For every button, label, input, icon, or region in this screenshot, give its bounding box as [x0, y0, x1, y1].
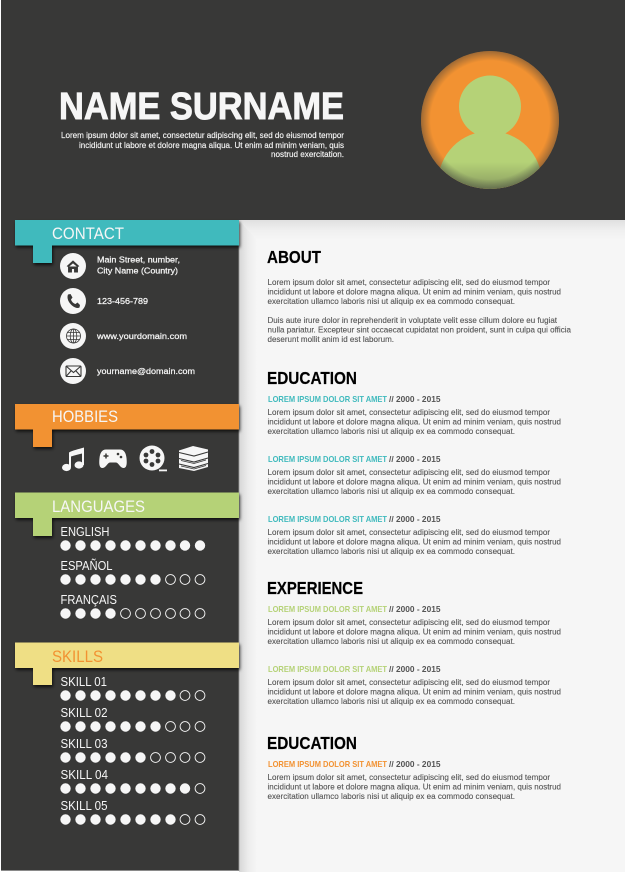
language: francais	[60, 593, 205, 619]
text block: about paragraph 2: deserunt mollit anim id est laborum.	[268, 334, 394, 344]
heading: about: ABOUT	[267, 247, 321, 267]
entry: experience 2: LOREM IPSUM DOLOR SIT AMET	[268, 665, 387, 674]
heading: skills ribbon	[15, 642, 239, 685]
skill 02: SKILL 02	[60, 706, 108, 720]
entry: experience 2: incididunt ut labore et dolore magna aliqua. Ut enim ad minim veniam, quis nostrud	[268, 686, 561, 696]
text block: about paragraph 1: incididunt ut labore et dolore magna aliqua. Ut enim ad minim veniam, quis nostrud	[268, 286, 561, 296]
entry: experience 1: // 2000 - 2015	[389, 604, 441, 614]
skill 05	[60, 799, 205, 825]
icon: envelope	[60, 358, 86, 384]
panel: skills	[15, 642, 239, 825]
panel: main content background	[239, 220, 625, 872]
heading: education second: EDUCATION	[267, 733, 357, 753]
text: phone: 123-456-789	[97, 296, 148, 306]
entry: experience 1: LOREM IPSUM DOLOR SIT AMET	[268, 605, 387, 614]
heading: hobbies ribbon	[15, 404, 239, 447]
heading: education: EDUCATION	[267, 368, 357, 388]
entry: education second 1: LOREM IPSUM DOLOR SIT AMET	[268, 760, 387, 769]
panel: header	[1, 0, 625, 235]
language: francais: FRANÇAIS	[60, 593, 117, 607]
entry: education second 1: // 2000 - 2015	[389, 759, 441, 769]
language: espanol: ESPAÑOL	[60, 559, 112, 573]
entry: experience 2: // 2000 - 2015	[389, 664, 441, 674]
skill 03: SKILL 03	[60, 737, 108, 751]
text block: intro	[61, 130, 344, 159]
panel: experience	[267, 578, 561, 706]
skill 02	[60, 706, 205, 732]
heading: experience: EXPERIENCE	[267, 578, 363, 598]
entry: experience 1: exercitation ullamco laboris nisi ut aliquip ex ea commodo consequat.	[268, 636, 515, 646]
entry: education 2: incididunt ut labore et dolore magna aliqua. Ut enim ad minim veniam, quis nostrud	[268, 476, 561, 486]
heading: contact ribbon	[15, 220, 239, 263]
text: address	[97, 254, 180, 276]
icon: books	[179, 446, 208, 471]
skill 04	[60, 768, 205, 794]
title: name: NAME SURNAME	[59, 86, 344, 128]
entry: experience 2: Lorem ipsum dolor sit amet, consectetur adipiscing elit, sed do eiusmod tempor	[268, 677, 550, 687]
text block: about paragraph 1: Lorem ipsum dolor sit amet, consectetur adipiscing elit, sed do eiusmod tempor	[268, 277, 550, 287]
entry: experience 1: incididunt ut labore et dolore magna aliqua. Ut enim ad minim veniam, quis nostrud	[268, 626, 561, 636]
entry: education second 1: Lorem ipsum dolor sit amet, consectetur adipiscing elit, sed do eiusmod tempor	[268, 772, 550, 782]
entry: education 3: Lorem ipsum dolor sit amet, consectetur adipiscing elit, sed do eiusmod tempor	[268, 527, 550, 537]
entry: education 2: LOREM IPSUM DOLOR SIT AMET	[268, 455, 387, 464]
text: address: City Name (Country)	[97, 266, 178, 276]
text block: intro: Lorem ipsum dolor sit amet, consectetur adipiscing elit, sed do eiusmod tempor	[61, 130, 344, 140]
text block: intro: nostrud exercitation.	[271, 149, 344, 159]
icon: profile photo placeholder	[421, 51, 559, 189]
entry: education 2: // 2000 - 2015	[389, 454, 441, 464]
icon: globe	[60, 323, 86, 349]
entry: experience 2	[268, 664, 561, 706]
icon: film reel	[140, 446, 167, 471]
text block: about paragraph 2: Duis aute irure dolor in reprehenderit in voluptate velit esse cillum dolore eu fugiat	[268, 315, 558, 325]
panel: education second	[267, 733, 561, 801]
text block: about paragraph 1: exercitation ullamco laboris nisi ut aliquip ex ea commodo consequat.	[268, 296, 515, 306]
text block: intro: incididunt ut labore et dolore magna aliqua. Ut enim ad minim veniam, quis	[79, 140, 344, 150]
skill 05: SKILL 05	[60, 799, 108, 813]
entry: education 1: // 2000 - 2015	[389, 394, 441, 404]
heading: contact ribbon: CONTACT	[52, 224, 124, 243]
language: espanol	[60, 559, 205, 585]
icon: phone	[60, 288, 86, 314]
text block: about paragraph 2: nulla pariatur. Excepteur sint occaecat cupidatat non proident, sunt in culpa qui officia	[268, 324, 571, 334]
entry: education 1: LOREM IPSUM DOLOR SIT AMET	[268, 395, 387, 404]
panel: contact	[15, 220, 239, 384]
language: english	[60, 525, 205, 551]
icon: home	[60, 253, 86, 279]
panel: about	[267, 247, 571, 344]
entry: education 1: Lorem ipsum dolor sit amet, consectetur adipiscing elit, sed do eiusmod tempor	[268, 407, 550, 417]
entry: education 3: incididunt ut labore et dolore magna aliqua. Ut enim ad minim veniam, quis nostrud	[268, 536, 561, 546]
language: english: ENGLISH	[60, 525, 110, 539]
entry: education 3: exercitation ullamco laboris nisi ut aliquip ex ea commodo consequat.	[268, 546, 515, 556]
entry: education 2: Lorem ipsum dolor sit amet, consectetur adipiscing elit, sed do eiusmod tempor	[268, 467, 550, 477]
entry: education 3	[268, 514, 561, 556]
entry: education 1	[268, 394, 561, 436]
entry: education 1: exercitation ullamco laboris nisi ut aliquip ex ea commodo consequat.	[268, 426, 515, 436]
entry: education 3: // 2000 - 2015	[389, 514, 441, 524]
panel: languages	[15, 492, 239, 619]
skill 01	[60, 675, 205, 701]
text block: about paragraph 2	[268, 315, 571, 344]
skill 04: SKILL 04	[60, 768, 108, 782]
skill 01: SKILL 01	[60, 675, 107, 689]
heading: skills ribbon: SKILLS	[52, 647, 103, 666]
heading: hobbies ribbon: HOBBIES	[52, 407, 118, 426]
text: email: yourname@domain.com	[97, 366, 195, 376]
text: website: www.yourdomain.com	[96, 331, 187, 341]
heading: languages ribbon: LANGUAGES	[52, 497, 145, 516]
entry: education 1: incididunt ut labore et dolore magna aliqua. Ut enim ad minim veniam, quis nostrud	[268, 416, 561, 426]
entry: education second 1: exercitation ullamco laboris nisi ut aliquip ex ea commodo consequat.	[268, 791, 515, 801]
text block: about paragraph 1	[268, 277, 561, 306]
entry: experience 2: exercitation ullamco laboris nisi ut aliquip ex ea commodo consequat.	[268, 696, 515, 706]
entry: experience 1	[268, 604, 561, 646]
text: address: Main Street, number,	[97, 254, 180, 264]
icon: gamepad	[99, 450, 127, 468]
entry: education 2: exercitation ullamco laboris nisi ut aliquip ex ea commodo consequat.	[268, 486, 515, 496]
panel: sidebar	[1, 220, 239, 871]
panel: education	[267, 368, 561, 556]
entry: education second 1	[268, 759, 561, 801]
entry: education 3: LOREM IPSUM DOLOR SIT AMET	[268, 515, 387, 524]
panel: hobbies	[15, 404, 239, 471]
entry: experience 1: Lorem ipsum dolor sit amet, consectetur adipiscing elit, sed do eiusmod tempor	[268, 617, 550, 627]
skill 03	[60, 737, 205, 763]
entry: education second 1: incididunt ut labore et dolore magna aliqua. Ut enim ad minim veniam, quis nostrud	[268, 782, 561, 792]
heading: languages ribbon	[15, 492, 239, 536]
icon: music	[62, 448, 84, 471]
entry: education 2	[268, 454, 561, 496]
